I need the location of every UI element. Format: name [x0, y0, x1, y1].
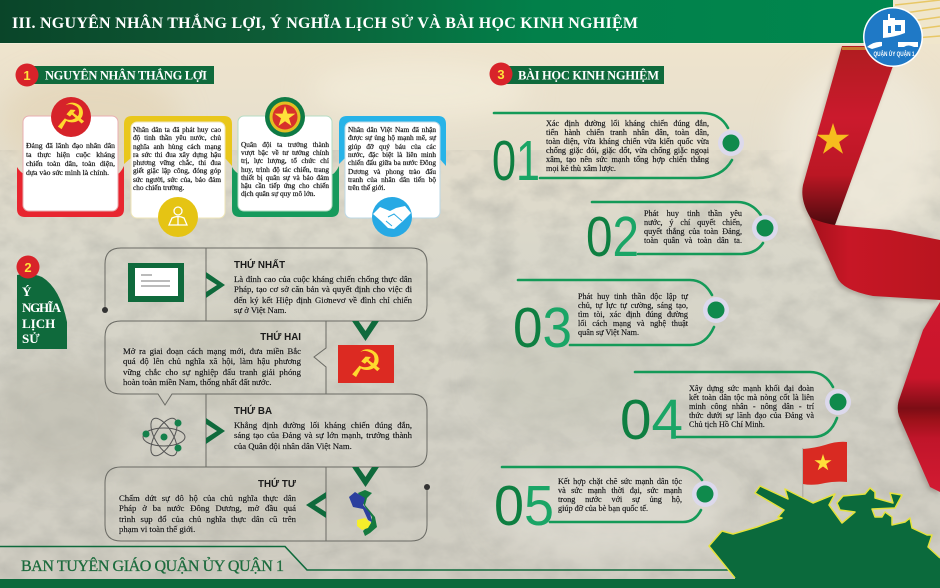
card 3 text [240, 140, 329, 198]
icon: Indochina map [349, 490, 377, 536]
logo: Quận ủy Quận 1 [863, 7, 923, 67]
lesson 02 [586, 200, 778, 269]
card 2 text: ra sức thi đua xây dựng hậu [133, 150, 221, 159]
heading 1: Nguyên nhân thắng lợi [16, 64, 214, 86]
second point text: hoàn toàn miền Nam, thống nhất đất nước. [123, 377, 272, 387]
card 3 text: huy, trình độ tác chiến, trang [241, 165, 329, 174]
second point text [122, 346, 301, 388]
card 4 text: tranh của nhân dân tiến bộ [348, 175, 436, 184]
heading 3: Bài học kinh nghiệm [490, 62, 664, 86]
fourth point text: trình sụp đổ của chủ nghĩa thực dân cũ trên [119, 514, 296, 524]
heading 2: Ý nghĩa lịch sử [16, 256, 67, 349]
heading 1: Nguyên nhân thắng lợi: NGUYÊN NHÂN THẮNG LỢI [45, 68, 207, 82]
lesson 05 text: giúp đỡ của bè bạn quốc tế. [558, 504, 648, 512]
card 4 text: nước, đặc biệt là liên minh [348, 150, 436, 159]
first point text: sự ở Việt Nam. [234, 305, 287, 315]
fourth point text [119, 493, 296, 534]
heading 2: Ý nghĩa lịch sử: LỊCH [22, 316, 55, 331]
flow diagram: historic significance [102, 248, 430, 542]
fourth point text: Pháp ở ba nước Đông Dương, mở đầu quá [119, 503, 296, 513]
icon: person [158, 197, 198, 237]
card 2 text: giết giặc lập công, đóng góp [133, 166, 221, 175]
first point text: đến ký kết Hiệp định Giơnevơ về đình chỉ chiến [234, 295, 412, 305]
lesson 04 [620, 370, 851, 452]
card 2 text: sức người, sức của, bảo đảm [133, 175, 221, 184]
heading 2: Ý nghĩa lịch sử: 2 [24, 260, 32, 275]
first point text [234, 274, 412, 315]
lesson 03: 03 [513, 296, 572, 360]
lesson 04 text: thức dưới sự lãnh đạo của Đảng và [689, 410, 814, 420]
icon: handshake [372, 197, 412, 237]
card 2 text: phương vững chắc, thi đua [133, 158, 221, 167]
third point text: của Quân đội nhân dân Việt Nam. [234, 441, 352, 451]
heading 2: Ý nghĩa lịch sử: NGHĨA [22, 300, 62, 315]
red ribbon with star [798, 2, 940, 494]
fourth point heading: THỨ TƯ [258, 479, 296, 490]
icon: atom [142, 414, 185, 460]
tank silhouette [708, 485, 940, 579]
lesson 05 [494, 466, 718, 538]
lesson 04 text: kết toàn dân tộc mà nòng cốt là liên [689, 392, 814, 402]
second point text: quá độ lên chủ nghĩa xã hội, làm hậu phương [123, 356, 301, 366]
lesson 01 [492, 112, 838, 488]
first point heading: THỨ NHẤT [234, 260, 285, 271]
card 4 text: chiến đấu giữa ba nước Đông [348, 158, 436, 167]
lesson 04 text: Xây dựng sức mạnh khối đại đoàn [689, 384, 814, 392]
footer lines and band [0, 546, 735, 588]
lesson 02 text: Phát huy tinh thần yêu [644, 209, 742, 218]
card 4 text [348, 125, 436, 192]
lesson 05 text [558, 476, 682, 514]
lesson 05 text: và sức mạnh thời đại, sức mạnh [558, 486, 682, 494]
lesson 05 text: trong nước với sự ủng hộ, [558, 494, 682, 504]
ribbon star [817, 123, 849, 154]
lesson 05: 05 [494, 474, 554, 538]
second point text: vững chắc cho sự nghiệp đấu tranh giải phóng [123, 367, 301, 377]
heading 3: Bài học kinh nghiệm: 3 [497, 67, 505, 82]
card 2 text: độ tinh thần yêu nước, chủ [133, 133, 221, 142]
card 1 text: chiến toàn dân, toàn diện, [26, 159, 115, 168]
top right sun rays [894, 0, 940, 38]
lesson 04 text: Chủ tịch Hồ Chí Minh. [689, 420, 765, 428]
heading 3: Bài học kinh nghiệm: BÀI HỌC KINH NGHIỆM [518, 68, 659, 82]
card 2 text [133, 125, 221, 192]
card 4 text: giúp đỡ quý báu của các [348, 142, 436, 151]
header band with title [0, 0, 893, 44]
card 4 text: Dương và phong trào đấu [348, 167, 436, 176]
icon: party flag: ☭ [349, 342, 383, 386]
lesson 01 text: Xác định đường lối kháng chiến đúng đắn, [546, 119, 709, 128]
first point text: Là đỉnh cao của cuộc kháng chiến chống thực dân [234, 274, 412, 284]
card 4: Nhân dân Việt Nam được ủng hộ [339, 116, 446, 237]
Vietnamese flag on pole [802, 442, 847, 498]
lesson 01 text: mọi kẻ thù xâm lược. [546, 164, 616, 173]
heading 2: Ý nghĩa lịch sử: Ý [22, 284, 32, 299]
lesson 01 text: chống giặc đói, giặc dốt, vừa chống giặc ngoại [546, 146, 709, 155]
lesson 04: 04 [620, 388, 683, 452]
card 2 text: cho chiến trường. [133, 183, 184, 192]
lesson 02 text: quyết thắng của toàn Đảng, [644, 227, 742, 236]
lesson 03 text: chủ, tự lực tự cường, sáng tạo, [578, 301, 688, 310]
card 3 text: vượt bậc về tư tưởng chính [241, 148, 329, 157]
heading 2: Ý nghĩa lịch sử: SỬ [22, 331, 40, 346]
third point text: Khẳng định đường lối kháng chiến đúng đắn, [234, 420, 412, 430]
card 1: Đảng lãnh đạo [17, 97, 124, 217]
third point heading: THỨ BA [234, 406, 272, 417]
lesson 04 text: minh công nhân - nông dân - trí [689, 402, 814, 410]
lesson 05 text: Kết hợp chặt chẽ sức mạnh dân tộc [558, 476, 682, 486]
footer text: BAN TUYÊN GIÁO QUẬN ỦY QUẬN 1 [21, 556, 284, 575]
title: III. NGUYÊN NHÂN THẮNG LỢI, Ý NGHĨA LỊCH SỬ VÀ BÀI HỌC KINH NGHIỆM [12, 13, 638, 32]
card 3 text: trị, lực lượng, tổ chức chỉ [241, 156, 329, 165]
lesson 01 text: tiến hành chiến tranh nhân dân, toàn dân, [546, 128, 709, 137]
card 4 text: trên thế giới. [348, 183, 385, 192]
card 4 text: Nhân dân Việt Nam đã nhận [348, 125, 436, 134]
lesson 01 text: toàn diện, vừa kháng chiến vừa kiến quốc vừa [546, 137, 709, 146]
icon: party flag [338, 342, 394, 386]
lesson 01 text [546, 119, 709, 173]
lesson 04 text [689, 384, 814, 428]
fourth point text: Chấm dứt sự đô hộ của chủ nghĩa thực dân [119, 493, 296, 503]
lesson 02 text [644, 209, 742, 246]
second point heading: THỨ HAI [260, 332, 301, 343]
lesson 02: 02 [586, 205, 639, 269]
fourth point text: phạm vi toàn thế giới. [119, 524, 195, 534]
lesson 02 text: toàn quân và toàn dân ta. [644, 236, 742, 245]
lesson 01 text: xâm, tạo nên sức mạnh tổng hợp chiến thắng [546, 155, 709, 164]
icon: hammer and sickle: ☭ [55, 97, 87, 138]
lesson 01: 01 [492, 129, 540, 193]
card 3 text: thiết bị quân sự và bảo đảm [241, 173, 329, 182]
third point text [234, 420, 412, 451]
card 1 text [26, 141, 115, 177]
heading 1: Nguyên nhân thắng lợi: 1 [23, 68, 31, 83]
card 3 text: hậu cần tiếp ứng cho chiến [241, 181, 329, 190]
arrows: green chevrons [206, 272, 379, 518]
lesson 03 text: lối cách mạng và nghệ thuật [578, 319, 688, 328]
card 1 text: Đảng đã lãnh đạo nhân dân [26, 141, 115, 150]
card 1 text: dựa vào sức mình là chính. [26, 168, 109, 177]
icon: document board [128, 263, 184, 302]
third point text: sáng tạo của Đảng và sự lớn mạnh, trưởng thành [234, 430, 412, 440]
lesson 02 text: nước, ý chí quyết chiến, [644, 218, 742, 227]
card 1 text: ta thực hiện cuộc kháng [26, 150, 115, 159]
logo: Quận ủy Quận 1: QUẬN ỦY QUẬN 1 [874, 51, 915, 58]
lesson 03 text: quân sự Việt Nam. [578, 328, 639, 337]
card 2 text: nghĩa anh hùng cách mạng [133, 142, 221, 151]
card 4 text: được sự ủng hộ mạnh mẽ, sự [348, 133, 436, 142]
card 2 text: Nhân dân ta đã phát huy cao [133, 125, 221, 134]
lesson 03 [513, 278, 729, 360]
lesson 03 text: tìm tòi, xác định đúng đường [578, 310, 688, 319]
lesson 03 text [578, 292, 688, 338]
first point text: Pháp, tạo cơ sở căn bản và quyết định cho việc đi [234, 284, 412, 294]
card 2: Nhân dân phát huy [124, 116, 232, 237]
second point text: Mở ra giai đoạn cách mạng mới, đưa miền Bắc [123, 346, 301, 356]
lesson 03 text: Phát huy tinh thần độc lập tự [578, 292, 688, 300]
icon: army star emblem [265, 97, 305, 137]
card 3: Quân đội trưởng thành [232, 97, 339, 217]
card 3 text: Quân đội ta trưởng thành [241, 140, 329, 149]
card 3 text: dịch quân sự quy mô lớn. [241, 189, 315, 198]
